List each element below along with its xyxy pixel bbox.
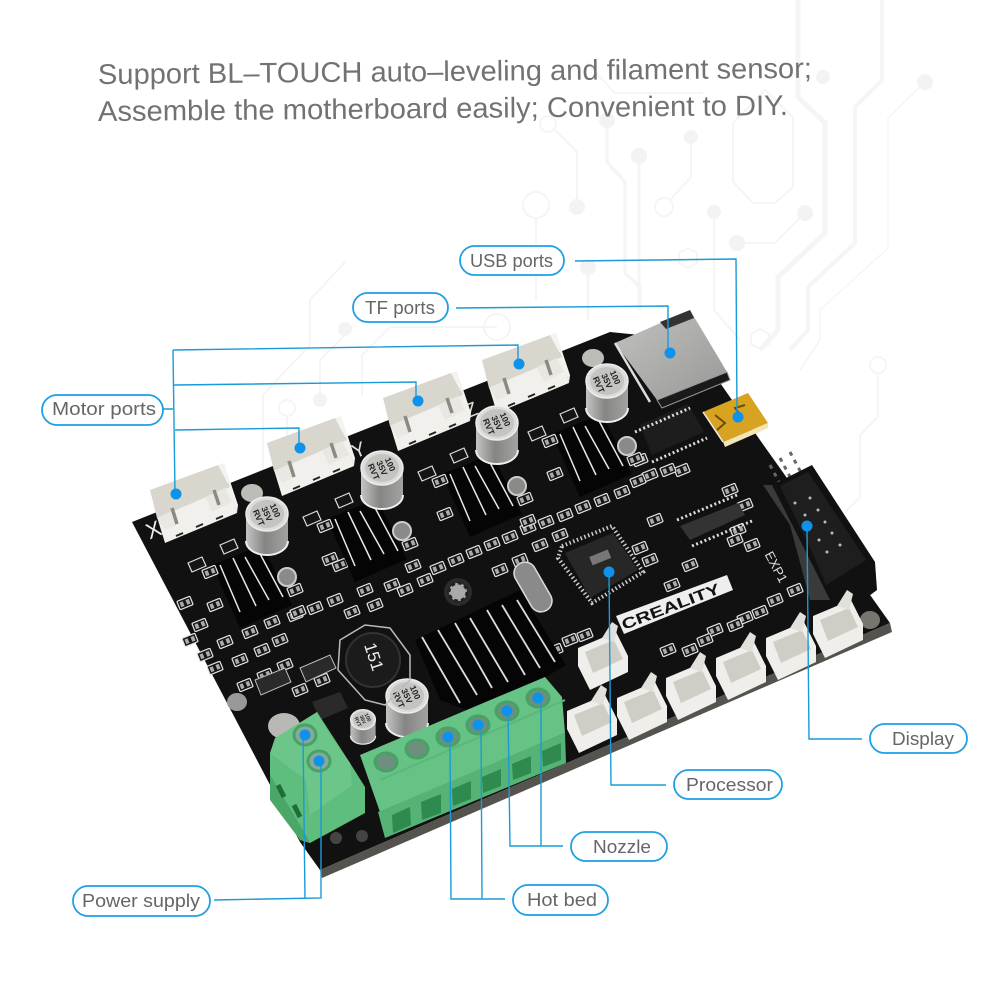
stepper driver heatsinks <box>188 408 646 628</box>
label: Nozzle <box>571 832 667 861</box>
USB side IC and small parts <box>635 404 806 546</box>
heading text: Support BL–TOUCH auto–leveling and filament sensor; <box>98 53 812 91</box>
line: TF ports <box>456 306 668 352</box>
CREALITY logo: CREALITY <box>619 581 723 634</box>
CREALITY logo <box>616 575 733 634</box>
board body <box>132 332 890 870</box>
label: TF ports: TF ports <box>365 298 435 318</box>
capacitors <box>246 364 628 737</box>
line: Processor <box>609 572 666 785</box>
SD card slot <box>615 310 730 408</box>
board bottom edge <box>320 623 892 878</box>
inductor: 151 <box>360 640 387 673</box>
EXP display connector <box>762 465 877 625</box>
label: USB ports <box>460 246 564 275</box>
line: Display <box>807 526 862 739</box>
silkscreen pads <box>177 453 803 707</box>
axis label Y: Y <box>349 438 369 463</box>
label: Display: Display <box>892 729 954 749</box>
six-way green terminal <box>360 677 566 838</box>
label: Hot bed <box>513 885 608 915</box>
USB port <box>703 393 768 447</box>
label: Hot bed: Hot bed <box>527 890 597 910</box>
small diodes <box>255 655 348 720</box>
label: Motor ports: Motor ports <box>52 399 156 419</box>
label: Processor <box>674 770 782 799</box>
mounting holes <box>227 349 880 844</box>
line: USB ports <box>575 259 737 415</box>
label: Power supply <box>73 886 210 916</box>
lines: Power supply <box>214 735 321 900</box>
crystal <box>510 558 556 616</box>
label: TF ports <box>353 293 448 322</box>
processor chip <box>558 526 643 603</box>
motor port connectors <box>150 333 570 543</box>
circuit board <box>132 310 892 878</box>
central heatsink <box>415 590 566 715</box>
labels <box>42 246 967 916</box>
two-way green terminal <box>270 712 365 843</box>
background: circuit traces <box>263 0 933 512</box>
callout dots <box>170 348 812 766</box>
label: Display <box>870 724 967 753</box>
heading text: Assemble the motherboard easily; Convenient to DIY. <box>98 90 788 128</box>
label: Motor ports <box>42 395 163 425</box>
label: Power supply: Power supply <box>82 891 200 911</box>
small white connectors <box>567 590 863 753</box>
axis label X: X <box>142 515 165 544</box>
callout lines <box>163 259 862 900</box>
label: Processor: Processor <box>686 775 773 795</box>
lines: Nozzle <box>508 700 563 846</box>
inductor <box>338 625 410 705</box>
lines: Motor ports <box>163 345 518 494</box>
electrolytic part <box>444 578 472 606</box>
axis label Z: Z <box>462 398 481 423</box>
lines: Hot bed <box>450 725 505 899</box>
label: Nozzle: Nozzle <box>593 837 651 857</box>
small capacitor <box>350 709 376 744</box>
label: USB ports: USB ports <box>470 251 553 271</box>
capacitor behind power terminal <box>268 713 300 739</box>
connector label: EXP1 <box>762 549 791 585</box>
heading text <box>98 53 812 128</box>
